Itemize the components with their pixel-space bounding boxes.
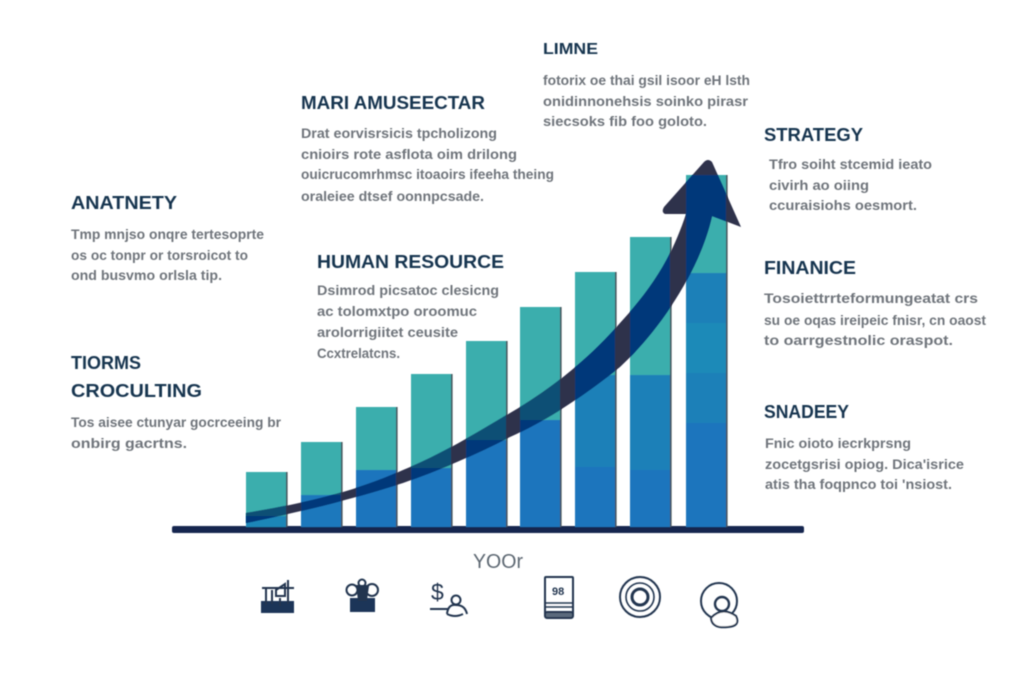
- text block: human resource: ac tolomxtpo oroomuc: [317, 304, 478, 319]
- icon: target circle: [620, 577, 660, 617]
- bar 5: [466, 341, 508, 527]
- text block: human resource: arolorrigiitet ceusite: [317, 325, 459, 340]
- text block: human resource: [317, 252, 504, 361]
- heading: anatnety: ANATNETY: [71, 193, 177, 213]
- text block: anatnety: os oc tonpr or torsroicot to: [71, 248, 248, 263]
- bar 3: [356, 407, 398, 527]
- text block: mari amuseectar: Drat eorvisrsicis tpcholizong: [301, 126, 497, 141]
- bar 9: [686, 175, 728, 527]
- icon: dollar and person: [430, 579, 467, 616]
- icon row: [261, 577, 737, 627]
- text block: anatnety: ond busvmo orlsla tip.: [71, 268, 222, 283]
- text block: snadeey: [764, 402, 965, 492]
- text block: mari amuseectar: oraleiee dtsef oonnpcsade.: [301, 189, 484, 204]
- text block: anatnety: Tmp mnjso onqre tertesoprte: [71, 227, 264, 242]
- text block: finanice: Tosoiettrrteformungeatat crs: [764, 291, 978, 306]
- text block: mari amuseectar: ouicrucomrhmsc itoaoirs ifeeha theing: [301, 167, 554, 182]
- text block: strategy: [764, 125, 932, 213]
- text block: tiorms croculting: CROCULTING: [71, 381, 202, 401]
- text block: tiorms croculting: Tos aisee ctunyar gocrceeing br: [71, 415, 282, 430]
- text block: human resource: Dsimrod picsatoc clesicng: [317, 283, 499, 298]
- bar 1: [246, 472, 288, 527]
- text block: mari amuseectar: cnioirs rote asflota oim drilong: [301, 147, 517, 162]
- bar 4: [411, 374, 453, 527]
- heading: snadeey: SNADEEY: [764, 402, 849, 422]
- text block: tiorms croculting: [71, 353, 282, 451]
- heading: tiorms croculting: TIORMS: [71, 353, 141, 373]
- text block: tiorms croculting: onbirg gacrtns.: [71, 436, 187, 451]
- icon: dollar and person: $: [431, 579, 444, 605]
- text block: strategy: Tfro soiht stcemid ieato: [769, 157, 932, 172]
- text block: limne: onidinnonehsis soinko pirasr: [543, 94, 749, 109]
- text block: human resource: Ccxtrelatcns.: [317, 346, 400, 361]
- text block: snadeey: atis tha foqpnco toi 'nsiost.: [765, 477, 952, 492]
- icon: factory: [261, 580, 294, 613]
- infographic canvas: [70, 42, 986, 630]
- text block: finanice: to oarrgestnolic oraspot.: [764, 333, 953, 348]
- bar 8: [630, 237, 672, 527]
- bar chart: [172, 175, 804, 533]
- heading: mari amuseectar: MARI AMUSEECTAR: [301, 93, 485, 113]
- icon: calendar book: 98: [552, 586, 564, 598]
- icon: person in circle: [701, 583, 737, 627]
- icon: team tree: [346, 580, 378, 612]
- heading: finanice: FINANICE: [764, 258, 856, 278]
- heading: limne: LIMNE: [543, 41, 598, 58]
- bar 6: [520, 307, 562, 527]
- bar 2: [301, 442, 343, 527]
- text block: mari amuseectar: [301, 93, 554, 204]
- heading: strategy: STRATEGY: [764, 125, 863, 145]
- text block: limne: siecsoks fib foo goloto.: [543, 114, 707, 129]
- text block: finanice: [764, 258, 987, 348]
- text block: strategy: civirh ao oiing: [769, 178, 869, 193]
- icon: calendar book: [545, 577, 573, 618]
- growth arrow: [246, 160, 741, 523]
- text block: snadeey: Fnic oioto iecrkprsng: [765, 436, 911, 451]
- text block: anatnety: [71, 193, 264, 283]
- axis baseline: [172, 526, 804, 533]
- text block: strategy: ccuraisiohs oesmort.: [769, 198, 917, 213]
- text block: limne: fotorix oe thai gsil isoor eH lsth: [543, 73, 750, 88]
- heading: human resource: HUMAN RESOURCE: [317, 252, 504, 272]
- text block: snadeey: zocetgsrisi opiog. Dica'isrice: [765, 457, 965, 472]
- bar 7: [575, 272, 617, 527]
- text block: limne: [543, 41, 750, 129]
- axis label: YOOr: [473, 551, 523, 573]
- text block: finanice: su oe oqas ireipeic fnisr, cn oaost: [764, 313, 987, 328]
